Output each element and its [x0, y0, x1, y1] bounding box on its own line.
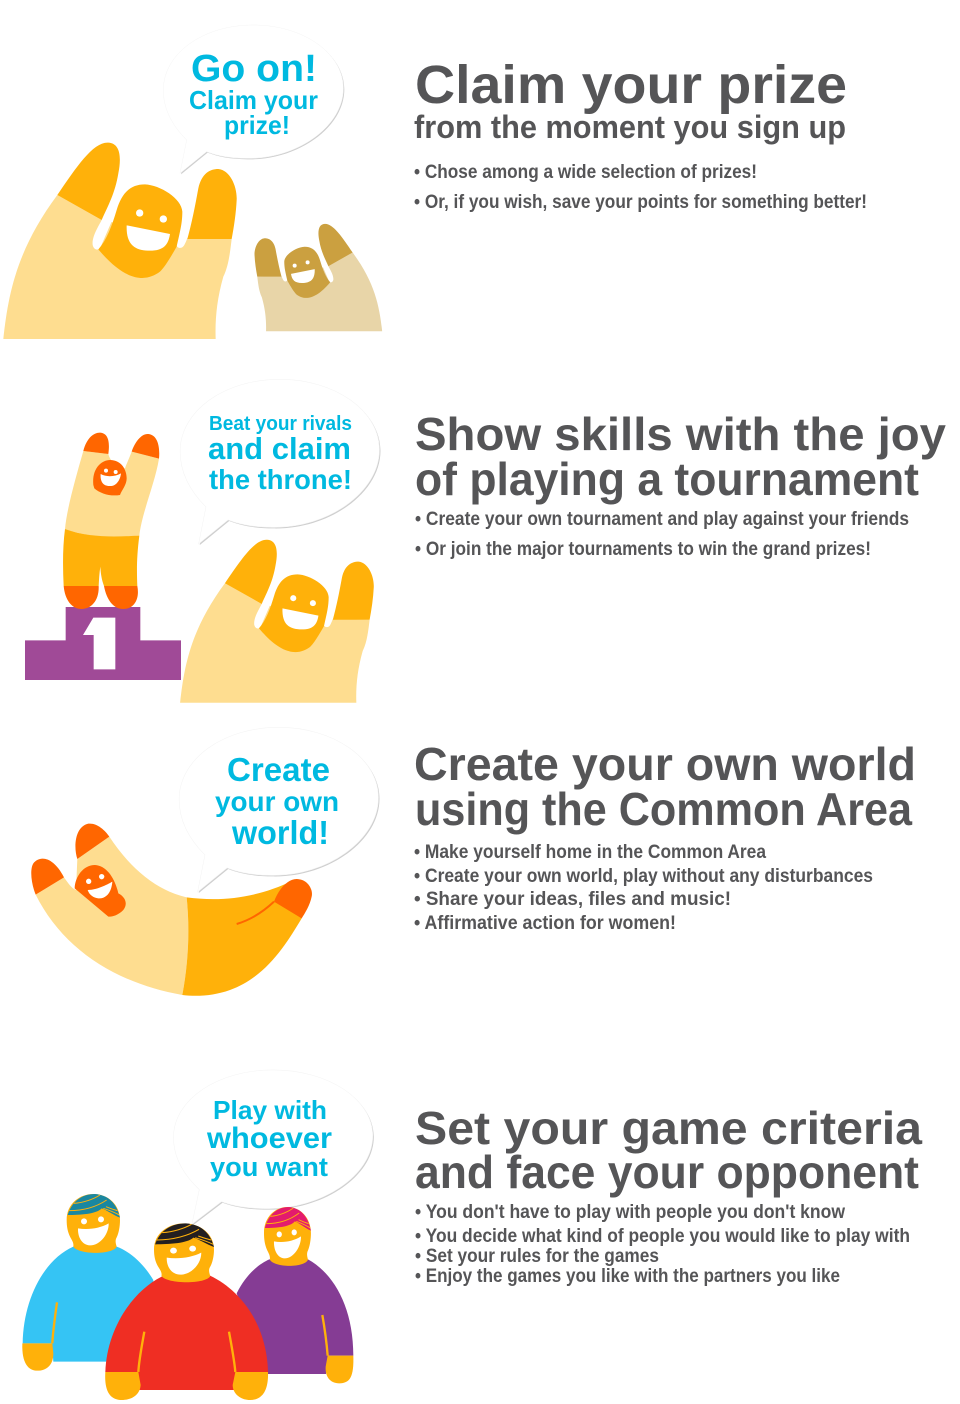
bullet list: • Or, if you wish, save your points for something better!: [414, 192, 867, 213]
heading: [415, 1102, 922, 1198]
panel: set your game criteria: [22, 1070, 922, 1400]
cheering character: [180, 540, 374, 703]
heading: [414, 738, 916, 835]
illustration: lounging character: [31, 727, 380, 996]
bubble text: [215, 751, 339, 851]
heading: Create your own world: [414, 738, 916, 790]
heading: [415, 408, 946, 505]
bubble text: [189, 48, 318, 140]
bullet list: [415, 509, 909, 560]
illustration: podium and characters: [25, 379, 381, 703]
bullet list: [415, 1202, 910, 1287]
panel: claim your prize: [3, 25, 867, 339]
bubble text: [206, 1095, 332, 1182]
bubble text: Go on!: [191, 48, 317, 90]
bullet list: • Create your own world, play without any disturbances: [414, 866, 873, 887]
illustration: cheering characters: [3, 25, 382, 339]
large character: [3, 143, 237, 339]
bullet list: • Create your own tournament and play against your friends: [415, 509, 909, 530]
podium: [25, 607, 181, 680]
bullet list: • You decide what kind of people you would like to play with: [415, 1226, 910, 1247]
speech bubble: [163, 25, 344, 174]
bubble text: Claim your: [189, 85, 318, 115]
bubble text: and claim: [208, 431, 351, 466]
heading: [414, 55, 847, 145]
panel: show skills: [25, 379, 946, 703]
illustration: three players: [22, 1070, 374, 1400]
bullet list: • Chose among a wide selection of prizes!: [414, 162, 757, 183]
purple player: [237, 1207, 353, 1383]
small character: [255, 224, 382, 331]
bullet list: [414, 842, 873, 934]
bullet list: • Set your rules for the games: [415, 1246, 659, 1267]
speech bubble: [173, 1070, 374, 1225]
bullet list: • Affirmative action for women!: [414, 913, 676, 934]
speech bubble: [179, 727, 380, 893]
bubble text: [208, 413, 352, 495]
panel: create your own world: [31, 727, 916, 996]
red player: [105, 1223, 268, 1400]
bubble text: Play with: [213, 1095, 327, 1125]
heading: of playing a tournament: [415, 453, 919, 505]
bubble text: whoever: [206, 1122, 332, 1155]
winner character: [63, 433, 159, 609]
speech bubble: [180, 379, 381, 545]
reclining character: [31, 824, 312, 996]
heading: Show skills with the joy: [415, 408, 946, 460]
bullet list: • You don't have to play with people you don't know: [415, 1202, 845, 1223]
bubble text: you want: [210, 1152, 328, 1182]
heading: Set your game criteria: [415, 1102, 922, 1154]
heading: Claim your prize: [415, 55, 847, 115]
bubble text: prize!: [224, 110, 290, 140]
heading: from the moment you sign up: [414, 109, 846, 145]
bullet list: • Share your ideas, files and music!: [414, 889, 731, 910]
bubble text: Create: [227, 751, 330, 788]
bullet list: • Make yourself home in the Common Area: [414, 842, 766, 863]
heading: and face your opponent: [415, 1146, 919, 1198]
bullet list: • Enjoy the games you like with the partners you like: [415, 1266, 840, 1287]
bubble text: your own: [215, 786, 339, 817]
bubble text: world!: [231, 814, 329, 851]
bubble text: Beat your rivals: [209, 413, 352, 435]
blue player: [22, 1194, 153, 1371]
bullet list: • Or join the major tournaments to win the grand prizes!: [415, 539, 871, 560]
bubble text: the throne!: [209, 464, 352, 495]
heading: using the Common Area: [415, 783, 912, 835]
bullet list: [414, 162, 867, 213]
